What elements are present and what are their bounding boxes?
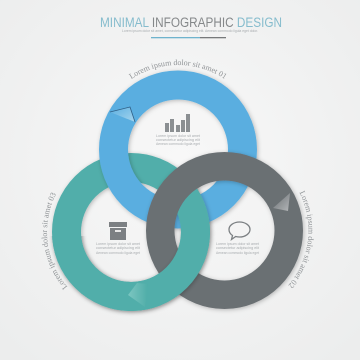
- gray panel text: Aenean commodo ligula eget: [216, 251, 259, 255]
- teal ring top overlap: [66, 168, 196, 296]
- arc label 02: Lorem ipsum dolor sit amet 02: [288, 190, 314, 288]
- teal panel text: Aenean commodo ligula eget: [96, 251, 140, 255]
- arc label 01: Lorem ipsum dolor sit amet 01: [128, 60, 226, 79]
- title: [100, 15, 282, 38]
- title underline: [151, 37, 226, 38]
- gray panel text: Lorem ipsum dolor sit amet: [216, 242, 259, 246]
- teal panel text: Lorem ipsum dolor sit amet: [96, 242, 140, 246]
- teal panel text: [96, 242, 140, 255]
- blue panel text: [156, 134, 200, 146]
- blue panel text: consectetur adipiscing elit: [156, 138, 200, 142]
- blue panel text: Lorem ipsum dolor sit amet: [156, 134, 200, 138]
- gray ring: [160, 166, 290, 295]
- subtitle: Lorem ipsum dolor sit amet, consectetur adipiscing elit. Aenean commodo ligula eget dolor.: [122, 29, 258, 33]
- blue ring fold: [110, 107, 135, 122]
- teal ring base: [66, 168, 196, 296]
- bar chart icon: [165, 114, 190, 132]
- teal ring fold: [128, 283, 148, 307]
- blue ring: [110, 85, 242, 214]
- speech bubble icon: [229, 222, 250, 240]
- gray panel text: [216, 242, 259, 255]
- arc label 03: Lorem ipsum dolor sit amet 03: [42, 192, 68, 290]
- blue panel text: Aenean commodo ligula eget: [156, 142, 200, 146]
- box icon: [109, 222, 127, 240]
- gray ring fold: [273, 193, 290, 211]
- gray panel text: consectetur adipiscing elit: [216, 246, 259, 250]
- title: MINIMAL INFOGRAPHIC DESIGN: [100, 15, 282, 30]
- teal panel text: consectetur adipiscing elit: [96, 246, 140, 250]
